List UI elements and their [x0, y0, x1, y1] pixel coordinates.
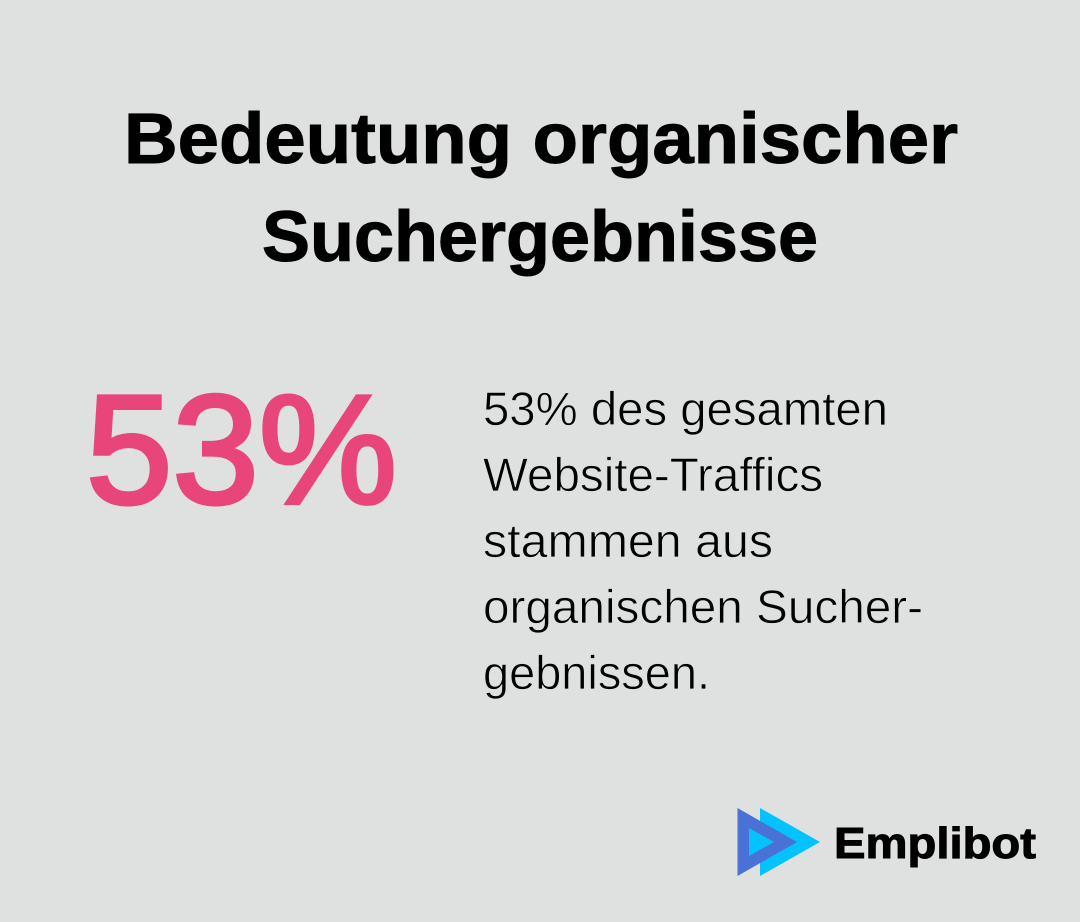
description text	[483, 382, 923, 699]
description text: Website-Traffics	[483, 448, 823, 501]
title	[124, 100, 958, 277]
description text: gebnissen.	[483, 646, 710, 699]
description text: stammen aus	[483, 514, 773, 567]
logo: Emplibot	[738, 808, 1036, 876]
description text: 53% des gesamten	[483, 382, 888, 435]
title: Bedeutung organischer	[124, 100, 958, 179]
logo wordmark: Emplibot	[834, 819, 1036, 868]
icon: play triangles	[738, 808, 820, 876]
big statistic: 53%: 53%	[86, 363, 397, 536]
title: Suchergebnisse	[262, 198, 818, 277]
description text: organischen Sucher-	[483, 580, 923, 633]
